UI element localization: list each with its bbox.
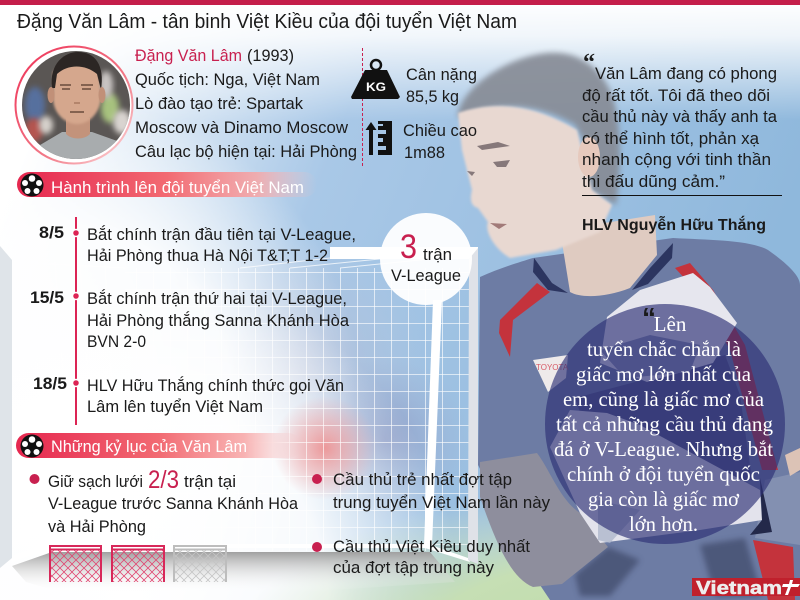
coach quote: nhanh cộng với tinh thần <box>582 150 771 169</box>
icon: goal saved 2 <box>112 546 164 582</box>
profile text: Quốc tịch: Nga, Việt Nam <box>135 70 320 89</box>
timeline entry 8/5: 8/5 <box>39 223 64 242</box>
player quote <box>554 302 773 536</box>
record: clean sheets: trận tại <box>184 472 236 491</box>
callout: 3 matches <box>380 213 472 305</box>
coach quote: Văn Lâm đang có phong <box>595 64 777 83</box>
timeline entry 18/5: Lâm lên tuyển Việt Nam <box>87 397 263 416</box>
title: Đặng Văn Lâm - tân binh Việt Kiều của đội tuyển Việt Nam <box>17 11 517 33</box>
callout: 3 matches: 3 <box>400 228 417 266</box>
section heading: records <box>16 433 301 458</box>
timeline entry 15/5 <box>30 288 350 351</box>
callout: 3 matches: trận <box>423 245 452 264</box>
right sleeve <box>755 472 800 545</box>
timeline entry 15/5: Bắt chính trận thứ hai tại V-League, <box>87 289 347 308</box>
record: clean sheets: và Hải Phòng <box>48 517 146 536</box>
weight stat <box>406 65 477 106</box>
ear <box>578 137 600 177</box>
player figure <box>458 53 800 600</box>
timeline entry 8/5 <box>39 223 356 265</box>
timeline <box>30 217 356 425</box>
player quote: lớn hơn. <box>629 512 698 536</box>
record: clean sheets: V-League trước Sanna Khánh Hòa <box>48 494 299 513</box>
icon: goal saved 1 <box>50 546 101 582</box>
portrait photo <box>16 46 132 164</box>
logo: Vietnam+: Vietnam <box>696 578 782 598</box>
icon: football <box>20 434 44 458</box>
face <box>458 106 612 258</box>
section heading: journey: Hành trình lên đội tuyển Việt Nam <box>51 178 304 197</box>
timeline entry 15/5: BVN 2-0 <box>87 332 146 351</box>
record: clean sheets: 2/3 <box>148 466 179 494</box>
player quote: Lên <box>654 312 687 336</box>
record: youngest player: trung tuyển Việt Nam lần này <box>333 493 550 512</box>
height stat: 1m88 <box>404 143 445 162</box>
profile text: Câu lạc bộ hiện tại: Hải Phòng <box>135 142 357 161</box>
coach quote: thi đấu dũng cảm.” <box>582 172 725 191</box>
timeline entry 8/5: Bắt chính trận đầu tiên tại V-League, <box>87 225 356 244</box>
icon: height ruler <box>366 121 392 155</box>
brow and eye <box>467 142 510 176</box>
timeline entry 8/5: Hải Phòng thua Hà Nội T&T;T 1-2 <box>87 246 328 265</box>
timeline entry 18/5 <box>33 374 344 416</box>
goal frame and net <box>0 246 478 592</box>
record: only overseas Vietnamese: Cầu thủ Việt Kiều duy nhất <box>333 537 530 556</box>
record: youngest player <box>312 470 550 512</box>
icon: weight <box>351 60 400 99</box>
left forearm <box>480 453 608 587</box>
timeline entry 18/5: 18/5 <box>33 374 67 393</box>
weight stat: Cân nặng <box>406 65 477 84</box>
record: youngest player: Cầu thủ trẻ nhất đợt tập <box>333 470 512 489</box>
sponsor patch: TOYOTA <box>536 363 569 372</box>
coach quote: độ rất tốt. Tôi đã theo dõi <box>582 86 770 105</box>
coach quote: cầu thủ này và thấy anh ta <box>582 107 778 126</box>
height stat <box>403 121 477 162</box>
timeline entry 15/5: Hải Phòng thắng Sanna Khánh Hòa <box>87 311 350 330</box>
shirt shadows <box>575 538 762 596</box>
logo: Vietnam+ <box>692 578 800 598</box>
player quote: giấc mơ lớn nhất của <box>576 362 752 386</box>
icon: goal conceded <box>174 546 226 582</box>
player quote: chính ở đội tuyển quốc <box>567 462 760 486</box>
purple quote circle backdrop <box>545 304 785 544</box>
coach quote <box>582 50 782 234</box>
icon: weight: KG <box>366 80 386 94</box>
collar <box>533 243 673 293</box>
profile text <box>135 46 357 161</box>
record: only overseas Vietnamese <box>312 537 530 577</box>
player quote: em, cũng là giấc mơ của <box>563 387 765 411</box>
callout: 3 matches: V-League <box>391 266 461 285</box>
height stat: Chiều cao <box>403 121 477 140</box>
player quote: gia còn là giấc mơ <box>588 487 740 511</box>
top accent bar <box>0 0 800 5</box>
sponsor patch <box>533 355 569 392</box>
record: only overseas Vietnamese: của đợt tập trung này <box>333 558 494 577</box>
coach quote: có thể hình tốt, phản xạ <box>582 129 760 148</box>
mouth <box>490 223 507 229</box>
player quote: tuyển chắc chắn là <box>587 337 742 361</box>
weight stat: 85,5 kg <box>406 87 459 106</box>
stats divider <box>362 48 364 168</box>
player quote: tất cả những cầu thủ đang <box>556 412 773 436</box>
icon: football <box>20 174 44 196</box>
record: clean sheets: Giữ sạch lưới <box>48 472 143 491</box>
gloves <box>575 355 752 480</box>
record: clean sheets <box>30 466 299 536</box>
timeline entry 18/5: HLV Hữu Thắng chính thức gọi Văn <box>87 376 344 395</box>
profile text: Moscow và Dinamo Moscow <box>135 118 349 137</box>
section heading: journey <box>17 172 317 197</box>
hair <box>458 53 620 205</box>
shirt <box>478 238 800 600</box>
profile text: Đặng Văn Lâm <box>135 46 242 65</box>
section heading: records: Những kỷ lục của Văn Lâm <box>51 437 247 456</box>
timeline entry 15/5: 15/5 <box>30 288 64 307</box>
player quote: đá ở V-League. Nhưng bắt <box>554 437 773 461</box>
profile text: Lò đào tạo trẻ: Spartak <box>135 94 303 113</box>
player quote: “ <box>642 302 656 333</box>
profile text: (1993) <box>247 46 294 65</box>
coach quote: HLV Nguyễn Hữu Thắng <box>582 215 766 234</box>
red shirt stripes <box>499 263 795 600</box>
neck <box>560 215 657 296</box>
coach quote: “ <box>583 50 595 76</box>
